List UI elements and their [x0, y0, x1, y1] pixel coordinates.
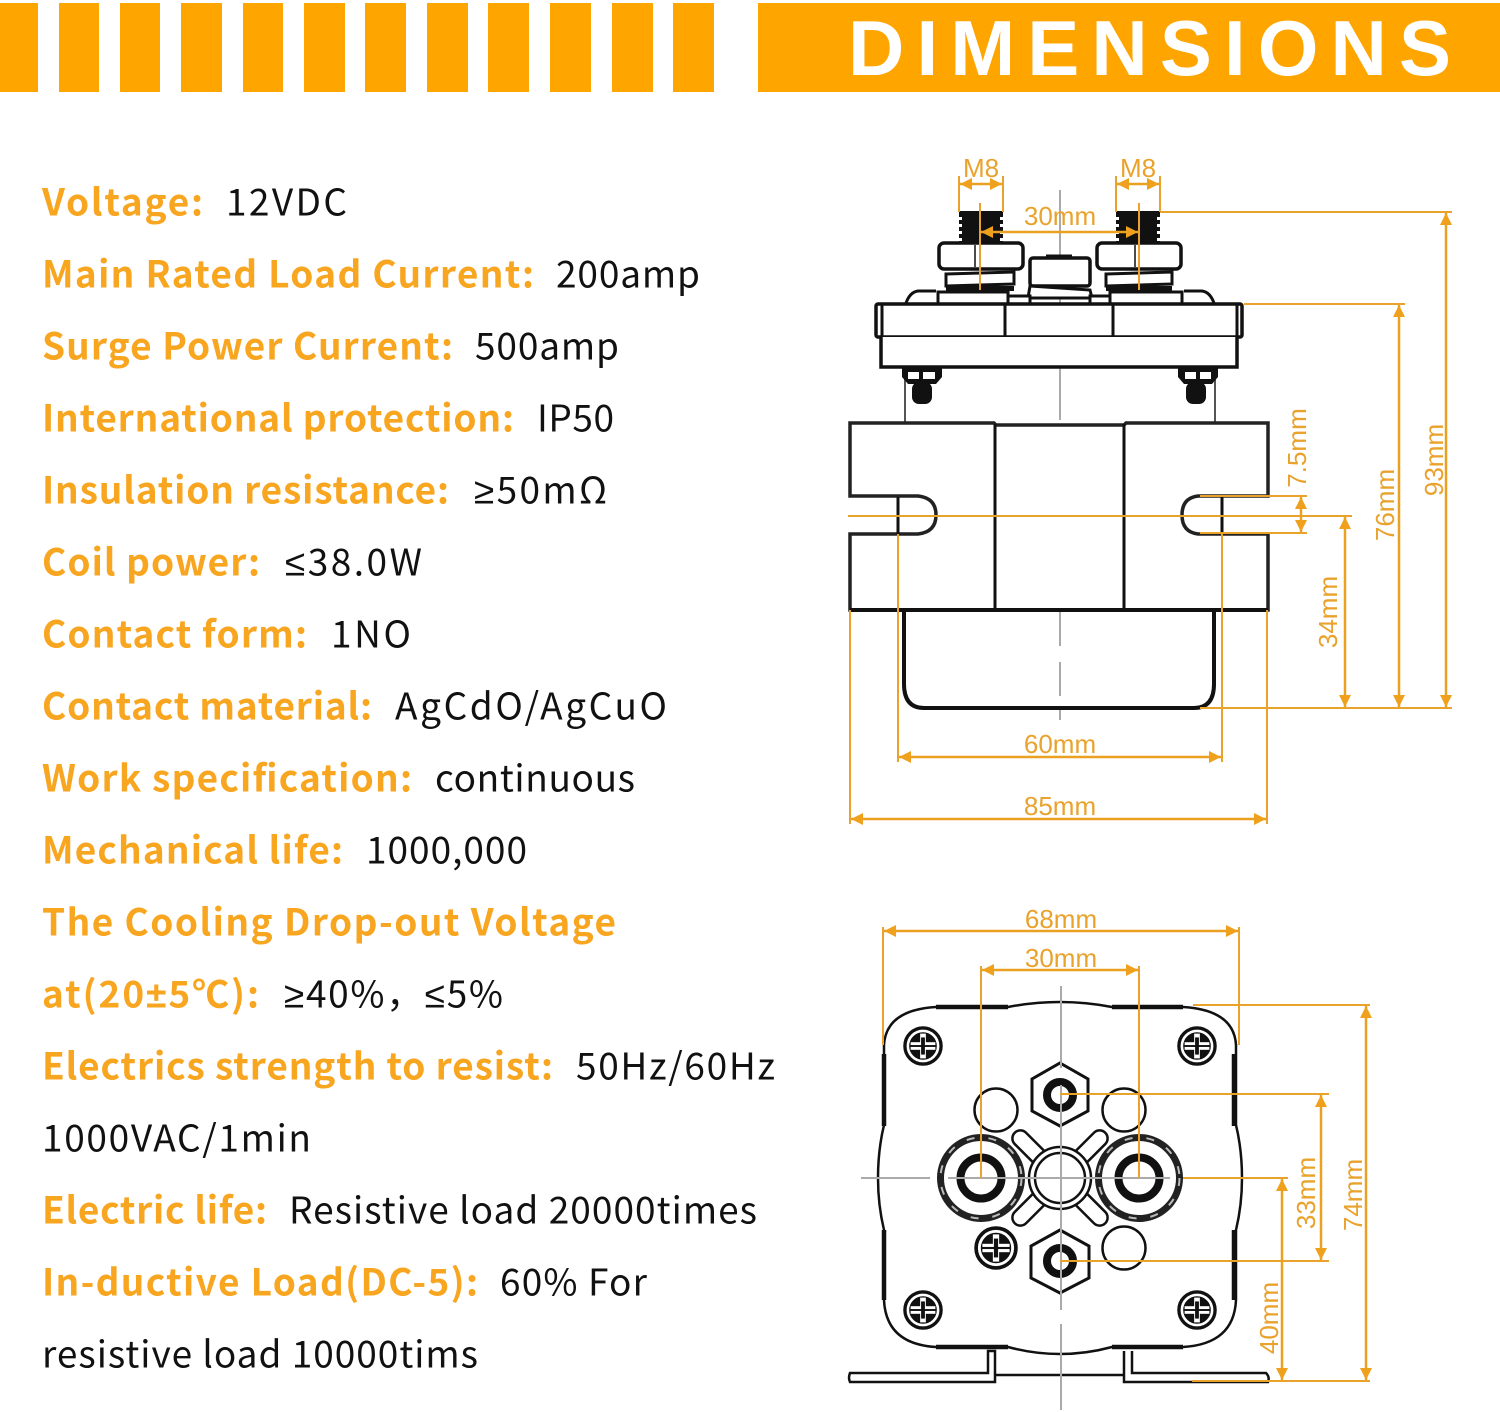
specification list [41, 172, 775, 1378]
spec: cooling drop-out voltage: The Cooling Drop-out Voltage [42, 892, 616, 946]
main body [850, 423, 1268, 610]
spec: coil power: Coil power: [42, 532, 260, 586]
bracket [849, 1351, 1269, 1382]
side view dimensions [848, 153, 1452, 824]
spec: work specification: Work specification: [42, 748, 412, 802]
spec: mechanical life: 1000,000 [366, 820, 527, 874]
spec: cooling drop-out voltage [42, 892, 616, 1018]
main terminals [940, 1138, 1180, 1218]
bottom view dimensions [883, 904, 1370, 1381]
extension lines [883, 927, 1370, 1381]
spec: insulation resistance: ≥50mΩ [474, 460, 607, 514]
corner screws [905, 1028, 1215, 1328]
mounting bolts [902, 367, 1218, 423]
spec: main rated load current: Main Rated Load Current: [42, 244, 534, 298]
housing thick edges [884, 1007, 1234, 1347]
spec: work specification [42, 748, 635, 802]
spec: international protection: IP50 [537, 388, 614, 442]
spec: contact form: 1NO [331, 604, 411, 658]
spec: mechanical life [42, 820, 527, 874]
extension lines [848, 176, 1452, 824]
spec: surge power current: Surge Power Current: [42, 316, 453, 370]
side view dimensions: 60mm [1024, 729, 1096, 759]
side view dimensions: 85mm [1024, 791, 1096, 821]
spec: electric life [42, 1180, 757, 1234]
spec: contact material: Contact material: [42, 676, 372, 730]
spec: electric life: Electric life: [42, 1180, 267, 1234]
spec: coil power [42, 532, 422, 586]
spec: surge power current: 500amp [475, 316, 619, 370]
bottom view dimensions: 40mm [1254, 1282, 1284, 1354]
spec: inductive load: In-ductive Load(DC-5): [42, 1252, 478, 1306]
dimension arrows [960, 183, 1002, 185]
header title bar [758, 3, 1500, 92]
side view dimensions: M8 [1120, 153, 1156, 183]
bottom view dimensions: 33mm [1291, 1157, 1321, 1229]
empty holes [974, 1088, 1146, 1270]
dimension labels: 68mm [1025, 904, 1097, 934]
side view drawing [848, 153, 1452, 824]
title: DIMENSIONS [848, 4, 1451, 92]
spec: electrics strength: Electrics strength to resist: [42, 1036, 553, 1090]
dimension arrows [884, 930, 1238, 932]
spec: voltage [41, 172, 347, 226]
centre x-shaped contact [1009, 1127, 1111, 1229]
bottom view drawing [849, 904, 1370, 1410]
spec: international protection: International protection: [42, 388, 514, 442]
bottom view dimensions: 74mm [1338, 1159, 1368, 1231]
side view dimensions: 76mm [1370, 469, 1400, 541]
spec: inductive load: 60% For [500, 1252, 648, 1306]
spec: cooling drop-out voltage: ≥40%，≤5% [284, 964, 503, 1018]
terminal studs and nuts [906, 211, 1214, 304]
spec: work specification: continuous [435, 748, 635, 802]
side view dimensions: 34mm [1313, 576, 1343, 648]
spec: contact material: AgCdO/AgCuO [395, 676, 667, 730]
spec: coil power: ≤38.0W [285, 532, 422, 586]
spec: inductive load: resistive load 10000tims [42, 1324, 478, 1378]
side view dimensions: 93mm [1419, 424, 1449, 496]
spec: inductive load [42, 1252, 648, 1378]
spec: cooling drop-out voltage: at(20±5℃): [42, 964, 259, 1018]
spec: contact material [42, 676, 667, 730]
bottom view dimensions: 30mm [1025, 943, 1097, 973]
dimension labels: M8 [963, 153, 999, 183]
spec: main rated load current: 200amp [556, 244, 700, 298]
centre lines [861, 986, 1170, 1410]
centre line [1059, 190, 1061, 720]
spec: mechanical life: Mechanical life: [42, 820, 343, 874]
hex nuts [1031, 1063, 1089, 1293]
side view dimensions: 7.5mm [1282, 408, 1312, 488]
spec: contact form: Contact form: [42, 604, 307, 658]
spec: electrics strength: 1000VAC/1min [42, 1108, 311, 1162]
spec: electric life: Resistive load 20000times [289, 1180, 757, 1234]
top plate [876, 304, 1242, 367]
housing outline [878, 1002, 1242, 1354]
spec: voltage: 12VDC [226, 172, 347, 226]
coil housing [904, 610, 1214, 708]
header banner [0, 3, 1500, 92]
side view dimensions: 30mm [1024, 201, 1096, 231]
spec: insulation resistance: Insulation resistance: [42, 460, 449, 514]
spec: electrics strength: 50Hz/60Hz [576, 1036, 775, 1090]
spec: voltage: Voltage: [41, 172, 203, 226]
spec: electrics strength [42, 1036, 775, 1162]
header stripes [0, 3, 714, 92]
